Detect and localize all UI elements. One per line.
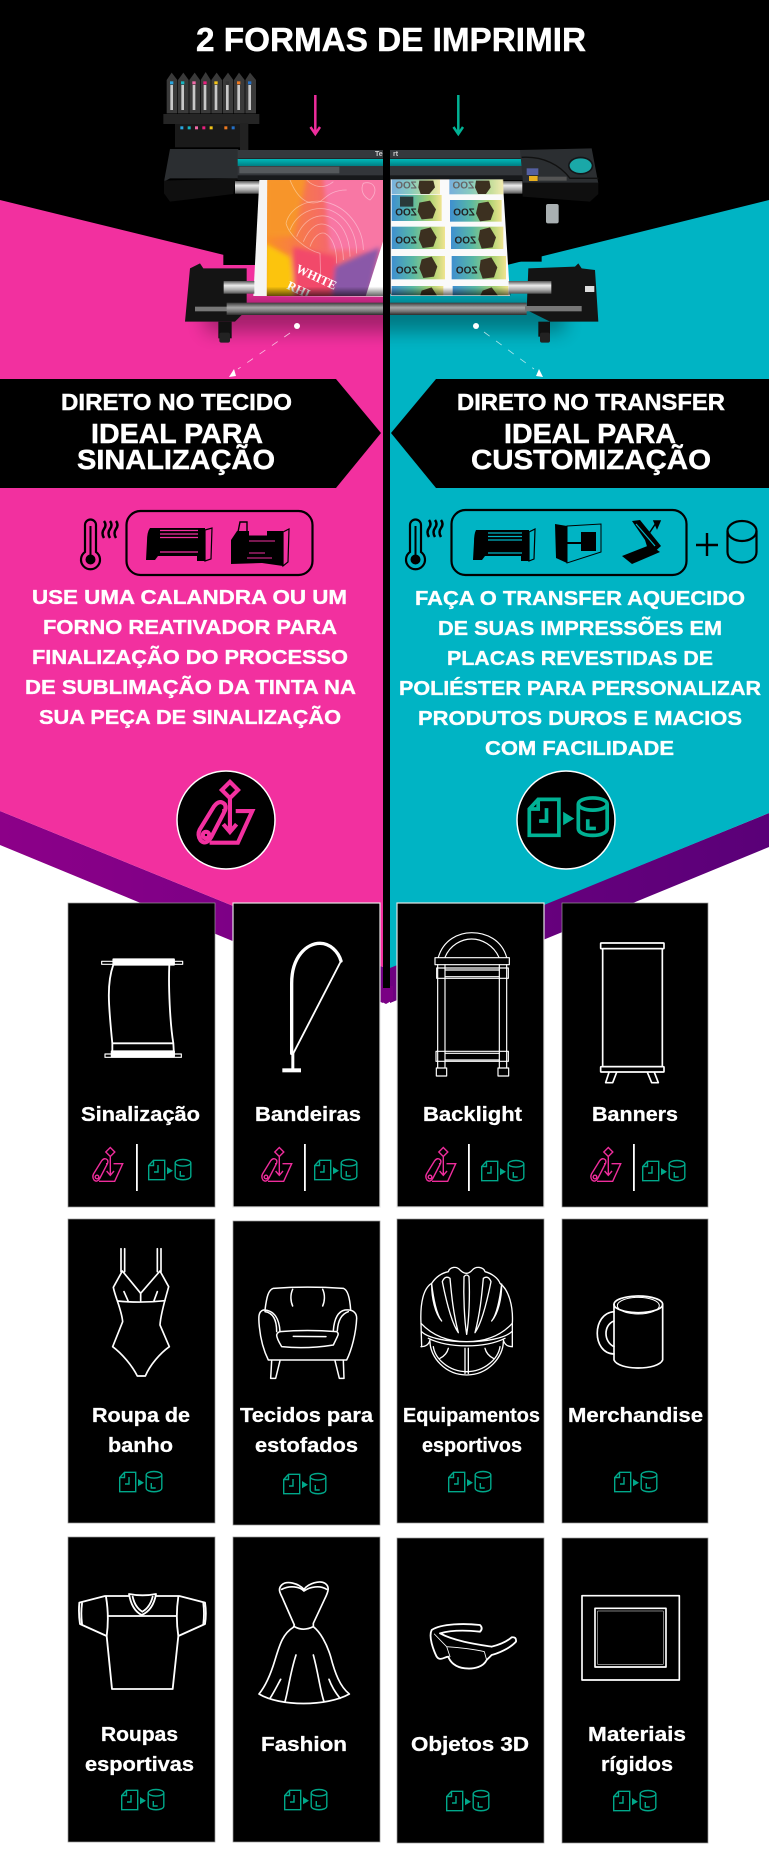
printer body right housing with control panel	[520, 148, 598, 202]
upper rollers	[235, 181, 262, 194]
banner: direto no tecido	[0, 379, 381, 488]
icon: plus sign	[696, 533, 718, 556]
icon: direct to fabric	[262, 1148, 292, 1181]
card: Objetos 3D	[397, 1538, 544, 1843]
left paper roll with artwork	[253, 177, 387, 301]
separator	[468, 1144, 470, 1191]
icon: rigid board	[582, 1596, 679, 1680]
icon: transfer	[615, 1472, 657, 1492]
arrow: pink down	[310, 95, 320, 134]
ink rack	[163, 72, 259, 150]
right paper roll with printed tiles: ZOO	[452, 181, 474, 192]
printer photo	[163, 72, 598, 343]
icon: sunglasses	[431, 1624, 516, 1669]
text block: left instructions: SUA PEÇA DE SINALIZAÇÃO	[39, 706, 341, 729]
center black divider	[383, 0, 390, 988]
icon: transfer	[447, 1790, 489, 1811]
card: Roupas esportivas: Roupas	[101, 1724, 178, 1746]
card: Tecidos para estofados	[233, 1221, 380, 1525]
equipment box right	[452, 510, 686, 575]
banner: direto no transfer: CUSTOMIZAÇÃO	[471, 444, 711, 475]
text block: right instructions: PLACAS REVESTIDAS DE	[447, 647, 713, 670]
right paper roll with printed tiles: ZOO	[454, 235, 476, 246]
text: rt	[393, 151, 399, 158]
icon: dress	[259, 1582, 349, 1703]
card: Banners: Banners	[592, 1104, 678, 1126]
purple chevron band left	[0, 811, 383, 1003]
icon: mug	[597, 1296, 663, 1368]
icon: calender machine	[473, 529, 535, 561]
dashed pointer left	[229, 323, 300, 377]
card: Backlight: Backlight	[423, 1104, 522, 1126]
left take-up unit	[185, 263, 254, 343]
arrow: teal down	[454, 95, 463, 134]
card: Materiais rígidos	[562, 1538, 708, 1843]
icon: reactivating oven	[231, 522, 289, 566]
card: Equipamentos esportivos: Equipamentos	[403, 1405, 540, 1427]
dashed pointer right	[473, 323, 543, 377]
background: black top area	[0, 0, 769, 500]
text block: left instructions: FINALIZAÇÃO DO PROCESSO	[32, 646, 348, 669]
purple tip under divider	[380, 986, 393, 1004]
icon: direct to fabric	[426, 1148, 456, 1181]
icon: swimsuit	[113, 1249, 169, 1376]
text block: right instructions: DE SUAS IMPRESSÕES EM	[438, 616, 722, 640]
icon: transfer	[614, 1790, 656, 1811]
panel: pink direct-to-fabric background	[0, 200, 383, 967]
icon: bike helmet	[421, 1267, 512, 1375]
right paper roll with printed tiles	[391, 179, 511, 297]
banner: direto no tecido: SINALIZAÇÃO	[77, 444, 275, 475]
text block: left instructions	[25, 586, 356, 729]
banner: direto no transfer	[391, 379, 769, 488]
card: Materiais rígidos: Materiais	[588, 1724, 686, 1746]
banner: direto no tecido: IDEAL PARA	[91, 418, 263, 449]
stand legs	[223, 193, 257, 265]
text block: right instructions: PRODUTOS DUROS E MACIOS	[418, 707, 742, 730]
text block: left instructions: USE UMA CALANDRA OU UM	[32, 586, 347, 609]
icon: hanging banner	[102, 959, 183, 1057]
right paper roll with printed tiles: ZOO	[453, 207, 475, 218]
text block: left instructions: FORNO REATIVADOR PARA	[43, 616, 337, 639]
icon: roll-up banner	[601, 943, 664, 1083]
card: Merchandise: Merchandise	[568, 1405, 703, 1427]
separator	[633, 1144, 635, 1191]
icon: thermometer left	[81, 520, 118, 569]
purple chevron band right	[390, 813, 769, 1003]
card: Tecidos para estofados: Tecidos para	[240, 1405, 374, 1427]
card: Sinalização	[68, 903, 215, 1207]
card: Roupas esportivas	[68, 1537, 215, 1842]
icon: transfer	[149, 1160, 191, 1180]
icon: transfer	[482, 1160, 524, 1181]
icon: jersey	[79, 1594, 206, 1689]
card: Backlight	[397, 903, 544, 1207]
banner: direto no tecido: DIRETO NO TECIDO	[61, 389, 292, 415]
card: Objetos 3D: Objetos 3D	[411, 1734, 529, 1756]
card: Sinalização: Sinalização	[81, 1104, 200, 1126]
icon: transfer	[284, 1474, 326, 1494]
right paper roll with printed tiles: ZOO	[456, 265, 477, 276]
card: Roupa de banho: banho	[108, 1435, 173, 1457]
icon: cylinder blank	[728, 521, 756, 562]
icon: transfer	[449, 1472, 491, 1492]
icon: thermometer right	[406, 520, 442, 569]
left paper roll with artwork: RHI	[285, 278, 312, 301]
text block: right instructions: POLIÉSTER PARA PERSONALIZAR	[399, 677, 761, 700]
right take-up unit	[509, 263, 598, 343]
card: Bandeiras: Bandeiras	[255, 1104, 361, 1126]
text block: right instructions	[399, 587, 761, 760]
title: 2 FORMAS DE IMPRIMIR	[196, 21, 586, 58]
icon: transfer	[315, 1160, 357, 1180]
card: Banners	[562, 903, 708, 1207]
card: Roupa de banho	[68, 1219, 215, 1523]
badge: transfer	[517, 771, 615, 869]
card: Fashion: Fashion	[261, 1734, 347, 1756]
printer head beam	[238, 150, 523, 180]
icon: transfer	[120, 1472, 162, 1492]
right paper roll with printed tiles: ZOO	[395, 207, 417, 218]
card: Fashion	[233, 1537, 380, 1842]
icon: heat press	[622, 520, 661, 564]
icon: backlight frame	[435, 933, 509, 1076]
right paper roll with printed tiles: ZOO	[395, 181, 417, 192]
text block: right instructions: COM FACILIDADE	[485, 737, 674, 760]
icon: transfer	[285, 1790, 327, 1810]
banner: direto no transfer: DIRETO NO TRANSFER	[457, 389, 725, 415]
card: Bandeiras	[233, 903, 380, 1207]
icon: armchair	[259, 1287, 357, 1378]
printer body left housing	[164, 149, 238, 202]
icon: feather flag	[282, 943, 341, 1072]
card: Merchandise	[562, 1219, 708, 1523]
floor shadow under printer	[205, 298, 565, 332]
banner: direto no transfer: IDEAL PARA	[504, 418, 676, 449]
card: Materiais rígidos: rígidos	[601, 1754, 673, 1776]
printer brand text fragment: Te	[375, 151, 383, 158]
artwork lettering: WHITE	[294, 262, 339, 293]
icon: transfer	[122, 1790, 164, 1810]
panel: teal transfer background	[390, 200, 769, 968]
ink bottle	[546, 204, 559, 223]
separator	[304, 1144, 306, 1191]
icon: direct to fabric	[93, 1148, 123, 1181]
card: Roupas esportivas: esportivas	[85, 1754, 194, 1776]
card: Equipamentos esportivos	[397, 1219, 544, 1523]
card: Roupa de banho: Roupa de	[92, 1405, 190, 1427]
lower tension bar	[195, 303, 582, 315]
badge: direct to fabric	[177, 771, 275, 869]
equipment box left	[126, 511, 312, 575]
right paper roll with printed tiles: ZOO	[395, 235, 417, 246]
icon: direct to fabric	[591, 1148, 621, 1181]
icon: transfer oven	[555, 524, 601, 563]
text block: right instructions: FAÇA O TRANSFER AQUECIDO	[415, 587, 745, 610]
right paper roll with printed tiles: ZOO	[396, 265, 417, 276]
icon: calender machine	[146, 528, 212, 561]
separator	[136, 1144, 138, 1191]
card: Equipamentos esportivos: esportivos	[422, 1435, 522, 1457]
icon: transfer	[643, 1160, 685, 1181]
text block: left instructions: DE SUBLIMAÇÃO DA TINTA NA	[25, 676, 356, 699]
card: Tecidos para estofados: estofados	[255, 1435, 358, 1457]
